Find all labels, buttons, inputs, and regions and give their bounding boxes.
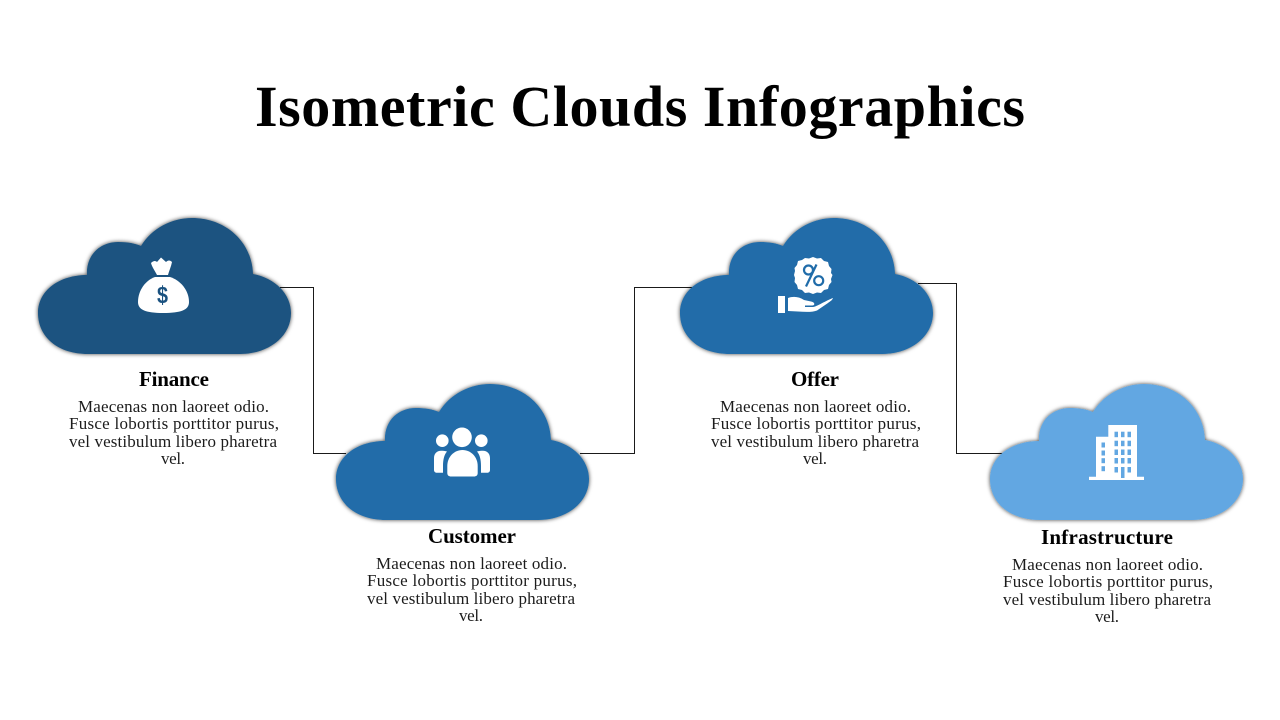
text block: offer: Fusce lobortis porttitor purus, <box>711 414 921 433</box>
text block: finance: Fusce lobortis porttitor purus, <box>69 414 279 433</box>
panel: finance <box>38 218 291 468</box>
text block: finance: Maecenas non laoreet odio. <box>78 397 269 416</box>
text block: customer: vel vestibulum libero pharetra <box>367 589 575 608</box>
text block: customer: Maecenas non laoreet odio. <box>376 554 567 573</box>
cloud: finance <box>38 218 291 354</box>
cloud: offer <box>680 218 933 354</box>
text block: infrastructure <box>1003 555 1213 626</box>
text block: finance: vel. <box>161 449 185 468</box>
text block: customer <box>367 554 577 625</box>
text block: customer: vel. <box>459 606 483 625</box>
cloud: infrastructure <box>990 384 1243 520</box>
panel: customer <box>336 384 589 625</box>
arrow: connector offer to infrastructure <box>918 284 1003 454</box>
text block: infrastructure: vel. <box>1095 607 1119 626</box>
text block: customer: Fusce lobortis porttitor purus, <box>367 571 577 590</box>
text block: offer: vel. <box>803 449 827 468</box>
icon: money bag <box>138 258 189 313</box>
icon: people <box>434 428 490 476</box>
heading: customer: Customer <box>428 524 516 548</box>
text block: offer <box>711 397 921 468</box>
arrow: connector customer to offer <box>580 288 692 454</box>
arrow: connector finance to customer <box>280 288 346 454</box>
text block: infrastructure: Maecenas non laoreet odio. <box>1012 555 1203 574</box>
cloud: customer <box>336 384 589 520</box>
heading: offer: Offer <box>791 367 839 391</box>
text block: offer: vel vestibulum libero pharetra <box>711 432 919 451</box>
text block: finance <box>69 397 279 468</box>
text block: finance: vel vestibulum libero pharetra <box>69 432 277 451</box>
text block: offer: Maecenas non laoreet odio. <box>720 397 911 416</box>
panel: offer <box>680 218 933 468</box>
heading: infrastructure: Infrastructure <box>1041 525 1173 549</box>
icon: percent in hand <box>778 257 833 313</box>
text block: infrastructure: vel vestibulum libero pharetra <box>1003 590 1211 609</box>
icon: building <box>1089 425 1144 480</box>
heading: finance: Finance <box>139 367 209 391</box>
panel: infrastructure <box>990 384 1243 626</box>
title: Isometric Clouds Infographics <box>255 74 1025 139</box>
icon: money bag: $ <box>157 282 169 309</box>
text block: infrastructure: Fusce lobortis porttitor purus, <box>1003 572 1213 591</box>
